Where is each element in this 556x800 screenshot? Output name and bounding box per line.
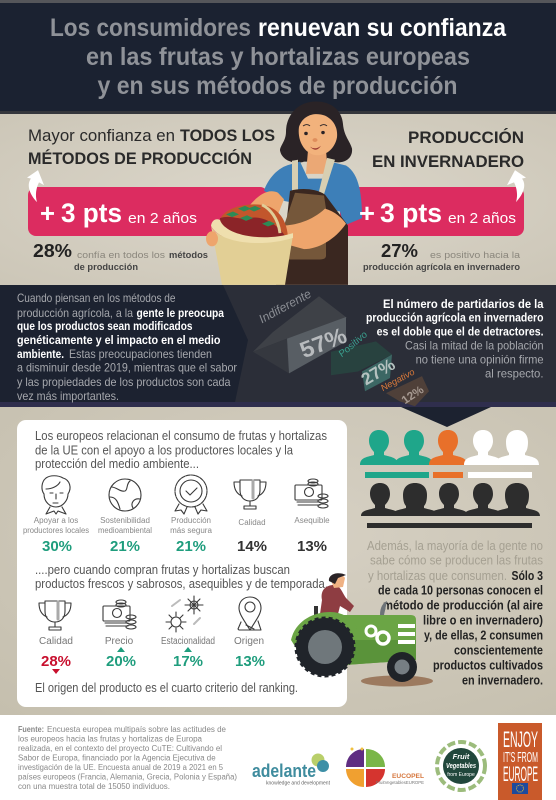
chart: opinion steps: 12%	[399, 383, 427, 407]
row 2 percentages	[41, 647, 265, 674]
text block: source: países europeos (Francia, Alemania, Grecia, Polonia y España)	[18, 772, 237, 782]
panel: footer	[0, 715, 556, 800]
title: Los consumidores	[50, 14, 251, 42]
icon: globe	[109, 479, 141, 511]
heading: all production methods	[28, 126, 275, 168]
icon: money	[103, 600, 136, 629]
chart: opinion steps: Negativo	[379, 367, 416, 393]
row 2 labels: Origen	[234, 636, 264, 647]
text block: production knowledge	[367, 539, 543, 688]
logo: Eucopel: EUCOPEL	[392, 773, 424, 780]
row 1 percentages	[42, 538, 327, 555]
text block: purchase criteria: ....pero cuando compran frutas y hortalizas buscan	[35, 563, 290, 577]
icon: trophy	[234, 480, 266, 509]
logo: Fruit and Vegetables from Europe: from Europe	[447, 772, 475, 778]
row 1 percentages: 21%	[176, 538, 206, 555]
text block: concerns: Estas preocupaciones tienden	[69, 347, 212, 361]
logo: Enjoy it's from Europe	[498, 723, 542, 800]
text block: production knowledge: libre o en invernadero)	[423, 614, 543, 628]
callout text: +3 pts right	[359, 198, 516, 228]
text block: concerns: a disminuir desde 2019, mientras que el sabor	[17, 360, 237, 374]
logo: Fruit and Vegetables from Europe: Fruit	[453, 752, 470, 761]
row 2 labels	[39, 636, 264, 647]
tractor illustration	[291, 573, 433, 686]
row 1 labels: Asequible	[294, 516, 330, 525]
logo: adelante: knowledge and development	[266, 780, 330, 786]
panel: white card	[17, 420, 347, 707]
callout text: +3 pts right: en 2 años	[448, 210, 516, 227]
title: y en sus métodos de producción	[98, 72, 458, 100]
logo: Fruit and Vegetables from Europe: Vegetables	[446, 761, 476, 770]
callout text: +3 pts left: 3 pts	[61, 198, 122, 228]
text block: source: Sabor de Europa, financiado por la Agencia Ejecutiva de	[18, 754, 216, 762]
row 1 labels: más segura	[170, 526, 212, 535]
row 2 percentages: 13%	[235, 653, 265, 670]
text block: concerns: genéticamente y el impacto en el medio	[17, 333, 220, 347]
text block: card intro	[35, 429, 327, 471]
text block: source: realizada, en el contexto del proyecto CuTE: Cultivando el	[18, 744, 222, 753]
row 1 percentages: 21%	[110, 538, 140, 555]
row 1 percentages: 30%	[42, 538, 72, 555]
statistic: 28%: 28%	[33, 241, 72, 261]
statistic: 28%: métodos	[169, 250, 208, 260]
chart: opinion steps: Positivo	[336, 329, 371, 360]
text block: production knowledge: conscientemente	[454, 644, 543, 658]
pink bar left	[28, 187, 268, 236]
text block: production knowledge: en invernadero.	[462, 674, 543, 688]
row 1 labels: Producción	[171, 516, 211, 525]
statistic: 27%: producción agrícola en invernadero	[363, 262, 521, 272]
text block: concerns: producción agrícola, a la	[17, 306, 133, 320]
row 2 percentages: 28%	[41, 653, 71, 670]
text block: concerns: y las propiedades de los productos son cada	[17, 375, 231, 389]
icon: trophy	[39, 601, 71, 630]
text block: concerns: ambiente.	[17, 347, 64, 361]
row 2 labels: Estacionalidad	[161, 636, 215, 647]
woman illustration	[250, 102, 362, 285]
logo: Fruit and Vegetables from Europe	[437, 742, 485, 790]
arrow right	[507, 170, 526, 202]
panel: opinions dark band	[0, 285, 556, 407]
arrow left	[27, 170, 44, 202]
row 1 labels: Apoyar a los	[34, 516, 78, 525]
row 2 labels: Calidad	[39, 636, 73, 647]
chart: opinion steps: 27%	[357, 354, 399, 389]
text block: concerns: vez más importantes.	[17, 389, 119, 403]
text block: production knowledge: sabe cómo se producen las frutas	[370, 554, 543, 568]
statistic: 28%: confía en todos los	[77, 250, 166, 260]
panel: confidence	[0, 114, 556, 285]
text block: source: con una muestra total de 15050 individuos.	[18, 782, 170, 791]
chart: opinion steps: Indiferente	[256, 287, 314, 326]
logo: adelante	[252, 754, 330, 786]
text block: supporters: al respecto.	[485, 366, 544, 380]
statistic: 27%: es positivo hacia la	[430, 250, 520, 260]
people pictogram	[360, 430, 540, 528]
row 1 percentages: 13%	[297, 538, 327, 555]
statistic: 28%: de producción	[74, 262, 138, 272]
heading: greenhouse production: EN INVERNADERO	[372, 152, 524, 171]
heading: greenhouse production: PRODUCCIÓN	[408, 128, 524, 147]
icon: money	[295, 479, 328, 508]
icon: safety badge	[175, 475, 207, 514]
icon: location pin	[238, 597, 261, 630]
row 1 labels	[23, 516, 330, 535]
statistic: 27%: 27%	[381, 241, 418, 261]
callout text: +3 pts left	[40, 198, 197, 228]
title	[50, 14, 507, 100]
callout text: +3 pts right: +	[359, 198, 375, 228]
text block: purchase criteria	[35, 563, 328, 591]
text block: supporters: no tiene una opinión firme	[416, 352, 544, 366]
text block: source: Fuente:	[18, 725, 44, 734]
text block: production knowledge: Sólo 3	[512, 569, 543, 583]
row 2 percentages: 17%	[173, 653, 203, 670]
icon: seasonality	[166, 596, 203, 632]
heading: all production methods: Mayor confianza en	[28, 126, 175, 145]
chart: opinion steps	[253, 287, 429, 407]
text block: card intro: de la UE con el apoyo a los productores locales y la	[35, 444, 293, 458]
callout text: +3 pts left: en 2 años	[128, 210, 197, 227]
text block: production knowledge: y hortalizas que consumen.	[368, 569, 507, 583]
logo: Eucopel: FruitVegetablesEUROPE	[376, 780, 424, 785]
panel: lower background	[0, 407, 556, 716]
heading: all production methods: TODOS LOS	[180, 126, 275, 145]
logo: Eucopel	[346, 748, 424, 787]
chevron	[401, 407, 491, 427]
row 1 labels: Calidad	[238, 518, 266, 527]
heading: all production methods: MÉTODOS DE PRODUCCIÓN	[28, 149, 252, 168]
text block: concerns	[17, 291, 237, 403]
row 1 labels: Sostenibilidad	[100, 516, 150, 525]
row 2 labels: Precio	[105, 636, 134, 647]
statistic: 28%	[33, 241, 208, 272]
heading: greenhouse production	[372, 128, 524, 171]
row 2 percentages: 20%	[106, 653, 136, 670]
text block: origin note: El origen del producto es el cuarto criterio del ranking.	[35, 681, 298, 695]
row 1 labels: productores locales	[23, 526, 89, 535]
text block: production knowledge: productos cultivados	[433, 658, 543, 672]
text block: concerns: que los productos sean modificados	[17, 319, 193, 333]
text block: concerns: gente le preocupa	[136, 306, 224, 320]
text block: supporters: Casi la mitad de la población	[405, 338, 544, 352]
text block: source: investigación de la UE. Encuesta anual de 2019 a 2021 en 5	[18, 763, 224, 772]
text block: concerns: Cuando piensan en los métodos de	[17, 291, 176, 305]
text block: supporters	[366, 297, 544, 380]
row 1 percentages: 14%	[237, 538, 267, 555]
text block: production knowledge: Además, la mayoría de la gente no	[367, 539, 543, 553]
basket with apples	[206, 204, 293, 285]
text block: card intro: protección del medio ambiente...	[35, 457, 199, 471]
text block: supporters: El número de partidarios de la	[383, 297, 544, 311]
text block: source: los europeos hacia las frutas y hortalizas de Europa	[18, 734, 203, 744]
text block: purchase criteria: productos frescos y sabrosos, asequibles y de temporada.	[35, 577, 328, 591]
callout text: +3 pts right: 3 pts	[380, 198, 442, 228]
text block: source: Encuesta europea multipaís sobre las actitudes de	[47, 725, 227, 734]
callout text: +3 pts left: +	[40, 198, 55, 228]
title: en las frutas y hortalizas europeas	[86, 43, 470, 71]
row 1 labels: medioambiental	[98, 526, 152, 535]
pink bar right	[340, 187, 524, 236]
text block: source	[18, 725, 237, 791]
statistic: 27%	[363, 241, 521, 272]
title: renuevan su confianza	[258, 14, 507, 42]
icon: farmer face	[42, 476, 70, 514]
header band	[0, 0, 556, 114]
logo: adelante: adelante	[252, 761, 316, 781]
text block: card intro: Los europeos relacionan el consumo de frutas y hortalizas	[35, 429, 327, 443]
chart: opinion steps: 57%	[296, 322, 351, 363]
